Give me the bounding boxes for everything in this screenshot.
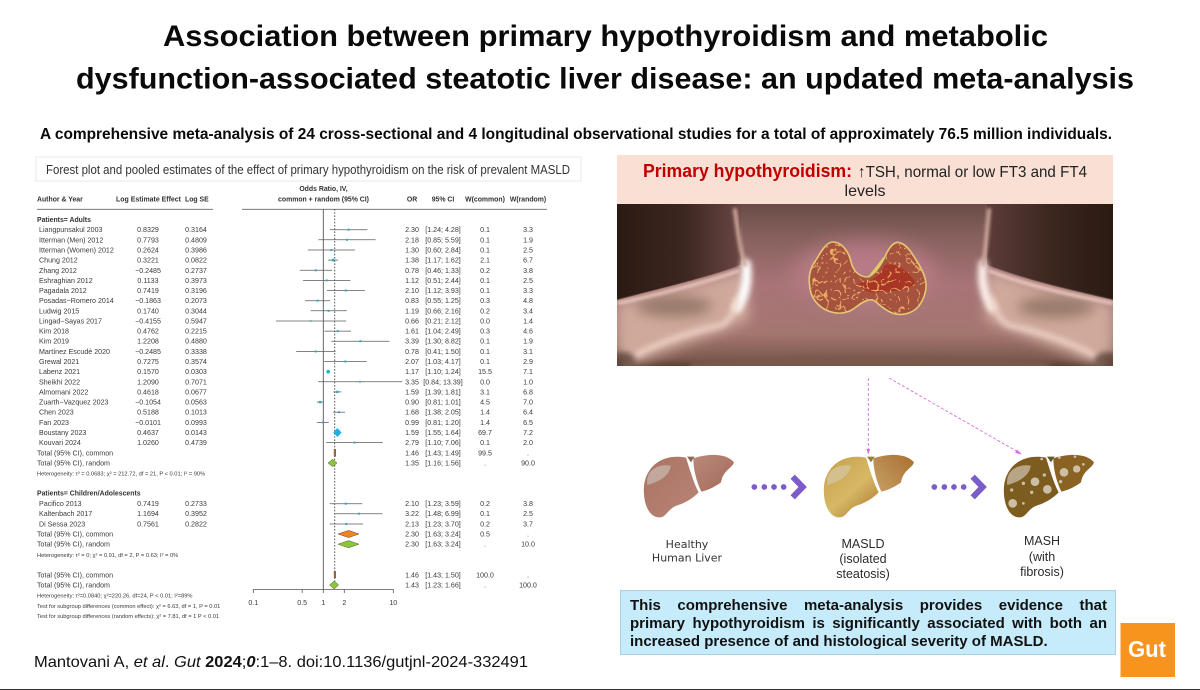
table header: W(common) [465,196,505,204]
log SE column: 0.4880 [185,338,207,346]
W(common) column: 0.0 [480,378,490,386]
95% CI column: [1.23; 3.70] [425,520,461,528]
icon: healthy liver [644,455,734,517]
study names column: Pacifico 2013 [39,500,82,508]
study names column: Kouvari 2024 [39,439,81,447]
W(random) column: 3.3 [523,226,533,234]
OR column: 2.30 [405,540,419,548]
95% CI column: [1.48; 6.99] [425,510,461,518]
x axis: 1 [321,599,325,607]
table header: W(random) [510,196,546,204]
conclusion box: This comprehensive meta-analysis provides evidence that [630,597,1107,614]
illustration: neck and thyroid gland [608,204,1122,370]
W(common) column: 0.2 [480,500,490,508]
log estimate column: 0.4762 [137,328,159,336]
W(random) column: 2.0 [523,439,533,447]
W(common) column: 0.1 [480,226,490,234]
95% CI column: [1.24; 4.28] [425,226,461,234]
log SE column: 0.2733 [185,500,207,508]
log SE column: 0.1013 [185,409,207,417]
study names column: Eshraghian 2012 [39,277,93,285]
study names column [37,217,220,620]
W(common) column: 69.7 [478,429,492,437]
W(common) column: 0.1 [480,338,490,346]
table header [37,186,547,209]
W(common) column: 0.3 [480,328,490,336]
W(common) column: 15.5 [478,368,492,376]
OR column [405,226,419,589]
log SE column: 0.3574 [185,358,207,366]
OR column: 1.68 [405,409,419,417]
study names column: Chen 2023 [39,409,74,417]
x axis: 0.1 [248,599,258,607]
W(random) column: 2.5 [523,246,533,254]
95% CI column: [1.12; 3.93] [425,287,461,295]
W(random) column: 3.8 [523,267,533,275]
W(random) column: 4.8 [523,297,533,305]
OR column: 1.46 [405,572,419,580]
OR column: 1.35 [405,459,419,467]
95% CI column: [0.55; 1.25] [425,297,461,305]
log SE column: 0.0993 [185,419,207,427]
study names column: Grewal 2021 [39,358,79,366]
W(common) column: 1.4 [480,409,490,417]
arrow: thyroid to MASLD [866,378,870,454]
log estimate column: 0.7793 [137,236,159,244]
log SE column: 0.2737 [185,267,207,275]
W(common) column: 0.1 [480,277,490,285]
x axis: 0.5 [297,599,307,607]
study names column: Total (95% CI), random [37,540,110,548]
OR column: 2.79 [405,439,419,447]
W(common) column: 0.2 [480,307,490,315]
log estimate column: 0.7275 [137,358,159,366]
95% CI column: [0.81; 1.01] [425,399,461,407]
study names column: Posadas−Romero 2014 [39,297,114,305]
log SE column: 0.2215 [185,328,207,336]
W(random) column: 6.7 [523,257,533,265]
95% CI column: [1.10; 1.24] [425,368,461,376]
OR column: 1.12 [405,277,419,285]
W(random) column: 6.5 [523,419,533,427]
W(random) column: 1.0 [523,378,533,386]
W(random) column: 6.4 [523,409,533,417]
W(random) column: 3.1 [523,348,533,356]
study names column: Di Sessa 2023 [39,520,85,528]
re-draw the dark background above the shoulders so the blur keeps a clean edge [617,204,741,299]
W(common) column: . [484,459,486,467]
study names column: Lingad−Sayas 2017 [39,318,102,326]
OR column: 1.59 [405,429,419,437]
OR column: 2.10 [405,287,419,295]
95% CI column: [0.21; 2.12] [425,318,461,326]
table header: common + random (95% CI) [278,196,369,204]
table header: Log Estimate Effect [116,196,182,204]
OR column: 3.35 [405,378,419,386]
OR column: 1.43 [405,582,419,590]
95% CI column: [0.46; 1.33] [425,267,461,275]
OR column: 1.61 [405,328,419,336]
log estimate column: −0.1054 [135,399,161,407]
W(random) column: 7.0 [523,399,533,407]
W(random) column: 3.3 [523,287,533,295]
W(common) column [476,226,494,589]
95% CI column: [1.10; 7.06] [425,439,461,447]
W(common) column: 0.1 [480,287,490,295]
log estimate column: −0.4155 [135,318,161,326]
log SE column: 0.4739 [185,439,207,447]
study names column: Zhang 2012 [39,267,77,275]
95% CI column: [1.63; 3.24] [425,540,461,548]
label: healthy liver: Human Liver [652,552,723,564]
OR column: 2.07 [405,358,419,366]
log estimate column: 1.2208 [137,338,159,346]
table header: Log SE [185,196,209,204]
conclusion box: increased presence of and histological severity of MASLD. [630,633,1048,650]
study names column: Kim 2019 [39,338,69,346]
95% CI column: [0.60; 2.84] [425,246,461,254]
W(random) column: 1.9 [523,338,533,346]
OR column: 1.17 [405,368,419,376]
log SE column: 0.3973 [185,277,207,285]
95% CI column: [0.81; 1.20] [425,419,461,427]
W(common) column: 3.1 [480,388,490,396]
label: healthy liver: Healthy [666,538,709,551]
log estimate column: 0.7419 [137,287,159,295]
bottom rule [0,689,1200,690]
W(random) column: 2.5 [523,277,533,285]
OR column: 1.38 [405,257,419,265]
log estimate column: 0.1570 [137,368,159,376]
study names column: Total (95% CI), random [37,582,110,590]
study names column: Zuarth−Vazquez 2023 [39,399,109,407]
study names column: Fan 2023 [39,419,69,427]
OR column: 1.19 [405,307,419,315]
W(random) column: 3.7 [523,520,533,528]
log estimate column [135,226,161,528]
log SE column: 0.3952 [185,510,207,518]
log estimate column: 0.3221 [137,257,159,265]
W(random) column: 4.6 [523,328,533,336]
study names column: Patients= Children/Adolescents [37,490,141,498]
95% CI column: [0.41; 1.50] [425,348,461,356]
label: MASLD [836,537,890,581]
W(random) column: 1.9 [523,236,533,244]
title: dysfunction-associated steatotic liver disease: an updated meta-analysis [76,62,1134,96]
W(common) column: 0.0 [480,318,490,326]
study names column: Ludwig 2015 [39,307,79,315]
study names column: Kim 2018 [39,328,69,336]
log SE column: 0.0822 [185,257,207,265]
log estimate column: 0.5188 [137,409,159,417]
log SE column: 0.3044 [185,307,207,315]
OR column: 0.78 [405,348,419,356]
label: healthy liver [652,538,723,564]
log estimate column: 0.4618 [137,388,159,396]
study names column: Pagadala 2012 [39,287,87,295]
citation: Mantovani A, et al. Gut 2024;0:1–8. doi:10.1136/gutjnl-2024-332491 [34,654,528,671]
study names column: Almomani 2022 [39,388,88,396]
log SE column: 0.2073 [185,297,207,305]
panel: primary hypothyroidism header: Primary hypothyroidism: [643,160,852,181]
OR column: 0.83 [405,297,419,305]
W(random) column: 3.4 [523,307,533,315]
study names column: Total (95% CI), random [37,459,110,467]
arrow: MASLD to MASH [931,477,983,497]
icon: MASLD liver [824,455,914,517]
OR column: 0.78 [405,267,419,275]
study names column: Itterman (Women) 2012 [39,246,114,254]
forest plot title box: Forest plot and pooled estimates of the effect of primary hypothyroidism on the risk of prevalent MASLD [46,163,570,177]
95% CI column: [1.16; 1.56] [425,459,461,467]
log estimate column: −0.2485 [135,348,161,356]
W(common) column: . [484,582,486,590]
W(common) column: 99.5 [478,449,492,457]
OR column: 2.30 [405,530,419,538]
W(common) column: 0.1 [480,439,490,447]
study names column: Sheikhi 2022 [39,378,80,386]
arrow: healthy to MASLD [751,477,803,497]
study names column: Labenz 2021 [39,368,80,376]
study names column: Martínez Escudé 2020 [39,348,110,356]
subtitle: A comprehensive meta-analysis of 24 cross-sectional and 4 longitudinal observational studies for a total of approximately 76.5 million individuals. [40,126,1112,143]
W(common) column: 1.4 [480,419,490,427]
study names column: Chung 2012 [39,257,78,265]
study names column: Kaltenbach 2017 [39,510,92,518]
conclusion box [620,590,1116,655]
OR column: 1.59 [405,388,419,396]
W(common) column: 0.1 [480,348,490,356]
label: MASH [1020,534,1064,579]
OR column: 0.90 [405,399,419,407]
W(random) column [519,226,537,589]
95% CI column: [1.43; 1.49] [425,449,461,457]
study names column: Total (95% CI), common [37,530,113,538]
x axis [248,590,397,607]
OR column: 3.22 [405,510,419,518]
W(random) column: 90.0 [521,459,535,467]
W(random) column: . [527,572,529,580]
forest plot title box [36,157,581,181]
OR column: 1.46 [405,449,419,457]
OR column: 1.30 [405,246,419,254]
95% CI column: [0.51; 2.44] [425,277,461,285]
95% CI column: [1.23; 1.66] [425,582,461,590]
label: MASH: (with [1029,550,1055,564]
panel: primary hypothyroidism header: ↑TSH, normal or low FT3 and FT4 [858,164,1087,181]
95% CI column [423,226,463,589]
OR column: 0.66 [405,318,419,326]
forest plot [37,186,547,620]
OR column: 2.10 [405,500,419,508]
study names column: Test for subgroup differences (common effect): χ² = 6.63, df = 1, P = 0.01 [37,604,220,610]
log estimate column: 1.1694 [137,510,159,518]
W(common) column: 0.1 [480,358,490,366]
study names column: Patients= Adults [37,217,91,224]
conclusion box: primary hypothyroidism is significantly associated with both an [630,615,1107,632]
95% CI column: [0.66; 2.16] [425,307,461,315]
log SE column: 0.3338 [185,348,207,356]
table header: Author & Year [37,196,83,204]
95% CI column: [1.39; 1.81] [425,388,461,396]
study names column: Heterogeneity: τ² = 0; χ² = 0.91, df = 2, P = 0.63; I² = 0% [37,553,178,559]
OR column: 2.13 [405,520,419,528]
W(random) column: 10.0 [521,540,535,548]
log estimate column: 1.2090 [137,378,159,386]
W(common) column: 2.1 [480,257,490,265]
OR column: 2.30 [405,226,419,234]
95% CI column: [1.17; 1.62] [425,257,461,265]
95% CI column: [0.84; 13.39] [423,378,463,386]
log SE column: 0.5947 [185,318,207,326]
log estimate column: −0.0101 [135,419,161,427]
W(common) column: 0.1 [480,246,490,254]
log estimate column: 0.4637 [137,429,159,437]
W(random) column: 3.8 [523,500,533,508]
W(common) column: 0.1 [480,236,490,244]
log SE column: 0.4809 [185,236,207,244]
95% CI column: [1.03; 4.17] [425,358,461,366]
W(random) column: 2.9 [523,358,533,366]
study names column: Liangpunsakul 2003 [39,226,103,234]
study names column: Total (95% CI), common [37,449,113,457]
W(random) column: . [527,530,529,538]
95% CI column: [1.63; 3.24] [425,530,461,538]
log SE column: 0.0143 [185,429,207,437]
log estimate column: 0.7561 [137,520,159,528]
study names column: Boustany 2023 [39,429,86,437]
OR column: 3.39 [405,338,419,346]
W(random) column: 2.5 [523,510,533,518]
thyroid gland [809,242,926,314]
log SE column: 0.3164 [185,226,207,234]
95% CI column: [1.38; 2.05] [425,409,461,417]
reference lines [323,209,335,590]
log SE column: 0.0677 [185,388,207,396]
log SE column: 0.0303 [185,368,207,376]
OR column: 2.18 [405,236,419,244]
study names column: Test for subgroup differences (random effects): χ² = 7.81, df = 1 P < 0.01 [37,614,219,620]
icon: MASH liver [1004,455,1094,517]
label: MASH: fibrosis) [1020,565,1064,579]
log estimate column: 1.0260 [137,439,159,447]
W(common) column: 4.5 [480,399,490,407]
label: MASH: MASH [1024,534,1060,548]
W(random) column: 7.1 [523,368,533,376]
95% CI column: [1.04; 2.49] [425,328,461,336]
W(common) column: . [484,540,486,548]
W(common) column: 0.2 [480,520,490,528]
95% CI column: [1.43; 1.50] [425,572,461,580]
W(common) column: 0.2 [480,267,490,275]
log estimate column: 0.8329 [137,226,159,234]
W(random) column: 7.2 [523,429,533,437]
95% CI column: [1.30; 8.82] [425,338,461,346]
95% CI column: [1.23; 3.59] [425,500,461,508]
label: MASLD: MASLD [841,537,885,551]
study names column: Heterogeneity: τ² = 0.0683; χ² = 212.72, df = 21, P < 0.01; I² = 90% [37,472,205,478]
confidence interval lines [276,230,402,524]
study names column: Itterman (Men) 2012 [39,236,103,244]
title: Association between primary hypothyroidism and metabolic [163,20,1048,53]
W(random) column: 6.8 [523,388,533,396]
table header: OR [407,196,417,204]
95% CI column: [1.55; 1.64] [425,429,461,437]
panel: primary hypothyroidism header: levels [845,183,885,200]
body silhouette [617,204,1113,366]
W(common) column: 0.3 [480,297,490,305]
study effect markers [310,229,361,525]
W(random) column: 100.0 [519,582,537,590]
table header: 95% CI [432,196,454,204]
shoulder highlights [608,204,1122,370]
log SE column: 0.0563 [185,399,207,407]
W(common) column: 0.5 [480,530,490,538]
W(common) column: 0.1 [480,510,490,518]
x axis: 2 [342,599,346,607]
95% CI column: [0.85; 5.59] [425,236,461,244]
log SE column: 0.3196 [185,287,207,295]
study names column: Heterogeneity: τ²=0.0840; χ²=220.26, df=24, P < 0.01; I²=89% [37,594,192,600]
log SE column: 0.7071 [185,378,207,386]
study names column: Total (95% CI), common [37,572,113,580]
logo: Gut: Gut [1128,636,1166,662]
log estimate column: 0.1133 [137,277,159,285]
x axis: 10 [389,599,397,607]
arrow: thyroid to MASH [889,378,1022,454]
log estimate column: 0.7419 [137,500,159,508]
W(common) column: 100.0 [476,572,494,580]
table header: Odds Ratio, IV, [299,186,348,193]
log SE column [185,226,207,528]
W(random) column: . [527,449,529,457]
OR column: 0.99 [405,419,419,427]
pooled estimate diamonds [328,449,359,589]
log estimate column: −0.2485 [135,267,161,275]
title [76,20,1134,96]
log SE column: 0.2822 [185,520,207,528]
log SE column: 0.3986 [185,246,207,254]
label: MASLD: steatosis) [836,567,890,581]
log estimate column: −0.1863 [135,297,161,305]
panel: primary hypothyroidism header [617,155,1113,204]
logo: Gut [1120,623,1175,677]
log estimate column: 0.2624 [137,246,159,254]
W(random) column: 1.4 [523,318,533,326]
log estimate column: 0.1740 [137,307,159,315]
label: MASLD: (isolated [839,552,887,566]
